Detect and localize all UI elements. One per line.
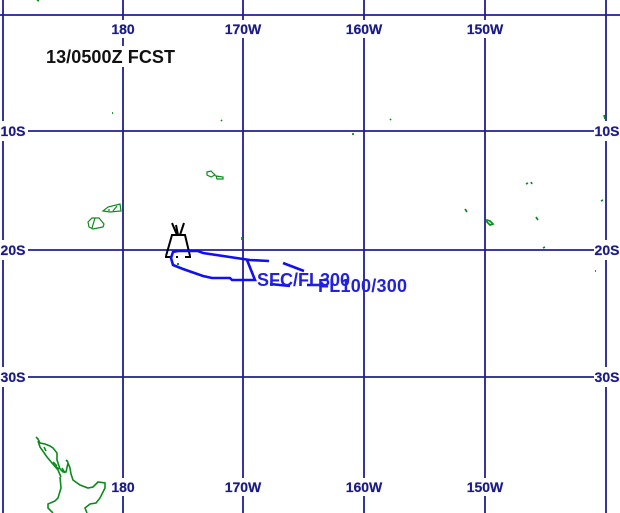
small island marker inside cloud: [177, 263, 179, 265]
longitude labels: top row: 150W: [467, 21, 504, 37]
title: 13/0500Z FCST: [46, 47, 175, 67]
land: New Zealand: [36, 437, 105, 513]
longitude labels: bottom row: [108, 478, 504, 496]
longitude labels: bottom row: 160W: [346, 479, 383, 495]
latitude labels: right column: 10S: [595, 123, 619, 139]
icon: volcano: [165, 223, 191, 258]
longitude labels: bottom row: 170W: [225, 479, 262, 495]
longitude labels: top row: 160W: [346, 21, 383, 37]
label: SFC/FL300: SFC/FL300: [257, 270, 350, 290]
label: FL100/300: FL100/300: [318, 276, 407, 296]
latitude labels: left column: 30S: [1, 369, 25, 385]
longitude labels: top row: 180: [111, 21, 135, 37]
latitude labels: left column: 10S: [1, 123, 25, 139]
latitude labels: left column: [0, 121, 28, 387]
latitude labels: right column: 30S: [595, 369, 619, 385]
ash cloud outline: SFC/FL300: [171, 251, 269, 280]
ash cloud outline: FL100/300: [270, 263, 323, 286]
longitude labels: top row: 170W: [225, 21, 262, 37]
latitude labels: right column: [594, 121, 620, 387]
latitude labels: right column: 20S: [595, 242, 619, 258]
land: Pacific islands: [88, 171, 223, 229]
longitude labels: bottom row: 150W: [467, 479, 504, 495]
longitude labels: bottom row: 180: [111, 479, 135, 495]
land: scattered atolls: [37, 0, 605, 271]
longitude labels: top row: [108, 20, 504, 38]
latitude labels: left column: 20S: [1, 242, 25, 258]
